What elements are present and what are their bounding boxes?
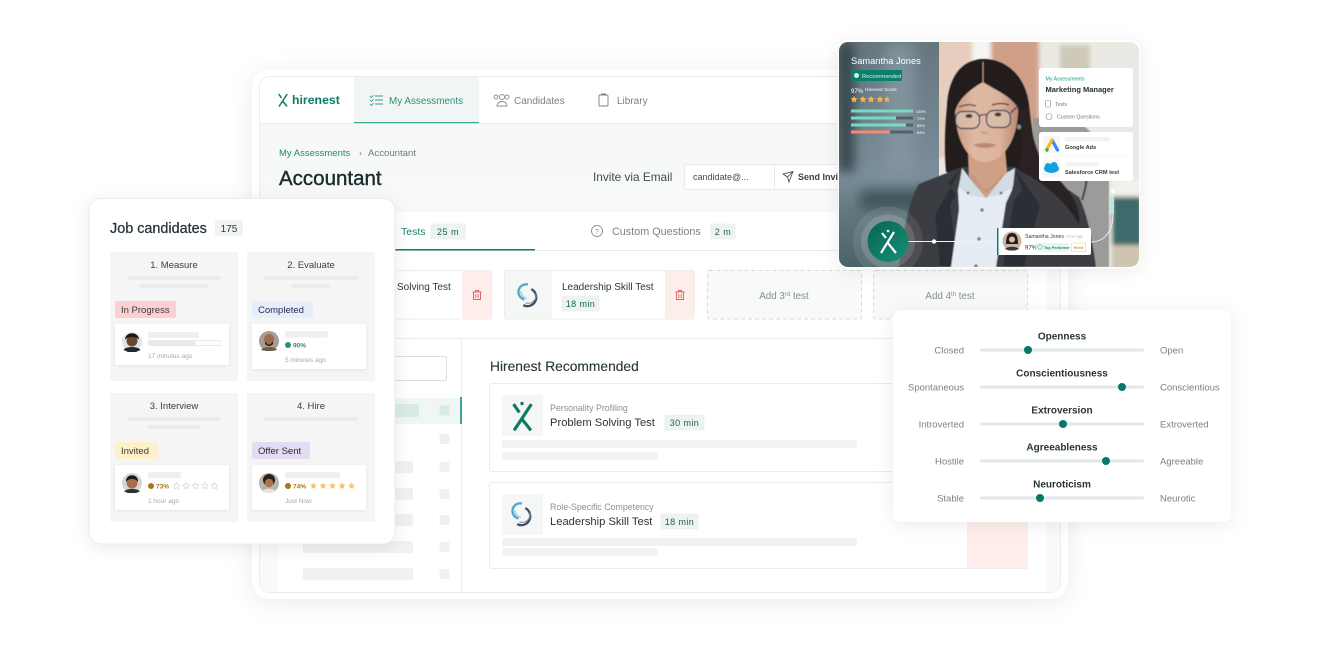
column: 1. Measure: 1. Measure (150, 260, 198, 271)
tab: Custom Questions: 2 m (715, 227, 731, 237)
count badge: 175 (221, 224, 238, 235)
candidate name and score overlay: Hirenest Score (865, 87, 897, 93)
tab: Tests (401, 224, 465, 239)
card: Marketing Manager: My Assessments (1046, 76, 1085, 82)
candidate card: 5 minutes ago (285, 357, 326, 364)
section tabs (395, 212, 1060, 251)
card: candidate summary: 1 hour ago (1065, 234, 1083, 238)
trait: Openness: Open (1160, 346, 1183, 356)
photo of candidate (838, 38, 1145, 273)
add 4th test slot (874, 270, 1028, 319)
candidate card: Just Now (285, 498, 312, 505)
invite via email: Invite via Email (593, 170, 672, 184)
glasses (956, 106, 1018, 128)
panel: main application window (252, 69, 1068, 599)
recommended card: Leadership Skill Test: Leadership Skill Test (550, 516, 653, 528)
badge: Recommended: Recommended (862, 74, 901, 80)
trait: Extroversion: Introverted (919, 420, 964, 430)
invite via email (593, 164, 850, 190)
content background (395, 251, 1047, 592)
add 4th test slot: test (956, 291, 975, 302)
score bars: 64% (917, 131, 925, 135)
shirt (951, 170, 1014, 267)
trait: Agreeableness (935, 442, 1203, 468)
tab: Tests: Tests (401, 226, 426, 238)
logo: hirenest: hirenest (292, 93, 340, 107)
test slot 1: Solving Test (397, 282, 451, 293)
trait: Neuroticism: Stable (937, 494, 964, 504)
add 4th test slot: Add 4 (925, 291, 951, 302)
candidate card: 73% (156, 484, 169, 490)
portrait (899, 59, 1109, 268)
trait: Extroversion: Extroversion (1031, 406, 1093, 416)
card: candidate summary: Top Performer (1044, 246, 1070, 250)
recommended card: Leadership Skill Test: Role-Specific Competency (550, 502, 654, 512)
column: 3. Interview: 3. Interview (150, 401, 198, 412)
candidate name and score overlay: 97% (851, 89, 864, 95)
back hair (945, 59, 1040, 175)
column: 1. Measure (110, 252, 238, 381)
navigation bar (260, 77, 1060, 124)
panel: personality profile (893, 310, 1231, 522)
score bars (851, 110, 926, 135)
trait: Neuroticism: Neurotic (1160, 494, 1196, 504)
trait: Openness (934, 332, 1183, 356)
test slot 2: Leadership Skill Test: Leadership Skill Test (562, 282, 654, 293)
nav item: Library (599, 94, 648, 107)
count badge (215, 220, 243, 236)
neck (968, 150, 1007, 198)
column: 4. Hire (247, 393, 375, 522)
candidate card: 1 hour ago (148, 498, 179, 505)
candidate name and score overlay: Samantha Jones (851, 56, 921, 66)
add 3rd test slot (708, 270, 862, 319)
recommended card: Leadership Skill Test: 18 min (665, 517, 694, 527)
recommended card: Problem Solving Test (490, 384, 1028, 472)
test slot 1 (395, 270, 492, 319)
face (955, 78, 1018, 162)
nav item: Candidates: Candidates (514, 96, 565, 107)
candidate card (252, 324, 366, 369)
status: In Progress: In Progress (121, 305, 170, 316)
card: candidate summary: Samantha Jones (1025, 234, 1064, 240)
page header background (260, 124, 1060, 212)
recommended card: Problem Solving Test: 30 min (670, 418, 699, 428)
trait: Conscientiousness (908, 368, 1220, 394)
eyebrows (959, 104, 1009, 107)
connector line (1091, 191, 1113, 242)
card: test integrations: Google Ads (1065, 145, 1096, 151)
test slot 2: Leadership Skill Test: 18 min (566, 299, 595, 309)
heading: Hirenest Recommended: Hirenest Recommended (490, 359, 639, 374)
score bars: 72% (917, 117, 925, 121)
trait: Openness: Closed (934, 346, 964, 356)
breadcrumb: My Assessments (279, 148, 351, 159)
column: 2. Evaluate: 2. Evaluate (287, 260, 335, 271)
trait: Neuroticism: Neuroticism (1033, 480, 1091, 490)
star rating (851, 96, 890, 102)
tab: Tests: 25 m (437, 227, 459, 237)
hair strand over jacket (1018, 108, 1079, 224)
trait: Conscientiousness: Spontaneous (908, 382, 964, 394)
active tab: My Assessments: My Assessments (389, 96, 463, 107)
buttons (980, 208, 984, 212)
trait: Conscientiousness: Conscientious (1160, 382, 1220, 394)
invite via email: candidate@... (693, 172, 749, 182)
column: 2. Evaluate (247, 252, 375, 381)
add 4th test slot: th (951, 292, 956, 298)
trait: Extroversion (919, 406, 1209, 430)
recommended card: Problem Solving Test: Personality Profiling (550, 403, 628, 413)
front hair (954, 58, 1019, 112)
column: 4. Hire: 4. Hire (297, 401, 325, 412)
tab: Custom Questions: ? (595, 229, 599, 236)
score bars: 89% (917, 124, 925, 128)
panel: Job candidates (89, 198, 395, 544)
card: candidate summary: Hired (1074, 246, 1084, 250)
panel: candidate video photo (838, 38, 1145, 276)
trait: Agreeableness: Agreeableness (1026, 442, 1098, 454)
add 3rd test slot: rd (785, 292, 790, 298)
active tab: My Assessments (354, 77, 479, 123)
nav item: Candidates (494, 94, 565, 107)
logo badge with connector (853, 206, 981, 267)
status: Offer Sent: Offer Sent (258, 446, 301, 457)
tab: Custom Questions (592, 224, 735, 239)
breadcrumb: Accountant (368, 148, 416, 159)
candidate card: 74% (293, 484, 306, 490)
trait: Agreeableness: Hostile (935, 456, 964, 468)
candidate card: 17 minutes ago (148, 353, 193, 360)
icon: Salesforce (1043, 160, 1060, 177)
status: Completed: Completed (258, 305, 304, 316)
trait: Conscientiousness: Conscientiousness (1016, 368, 1108, 380)
heading: Accountant: Accountant (279, 167, 382, 190)
trait: Extroversion: Extroverted (1160, 420, 1209, 430)
candidate card (252, 465, 366, 510)
tab: Custom Questions: Custom Questions (612, 226, 701, 238)
trait: Agreeableness: Agreeable (1160, 456, 1203, 468)
add 3rd test slot: test (790, 291, 809, 302)
breadcrumb (279, 148, 416, 159)
status: Invited: Invited (121, 446, 149, 457)
sidebar test list (278, 339, 462, 592)
candidate card (115, 465, 229, 510)
invite via email: Send Invi (798, 172, 838, 182)
add 3rd test slot: Add 3 (759, 291, 785, 302)
chair (1033, 118, 1109, 267)
breadcrumb: › (359, 148, 362, 158)
candidate name and score overlay (851, 56, 926, 135)
card: candidate summary: 97% (1025, 246, 1038, 252)
card: candidate summary (997, 228, 1091, 255)
card: test integrations (1039, 132, 1133, 181)
column: 3. Interview (110, 393, 238, 522)
test slot 2: Leadership Skill Test (504, 270, 694, 319)
nose and lips (981, 131, 988, 133)
candidate card: 90% (293, 342, 306, 350)
heading: Job candidates: Job candidates (110, 221, 207, 237)
candidate avatar (1002, 232, 1022, 250)
card: Marketing Manager: Custom Questions (1057, 114, 1100, 120)
nav item: Library: Library (617, 96, 648, 107)
trait: Openness: Openness (1038, 332, 1087, 342)
card: test integrations: Salesforce CRM test (1065, 170, 1119, 176)
icon: Google Ads (1043, 136, 1060, 153)
recommended card: Problem Solving Test: Problem Solving Test (550, 417, 656, 429)
card: Marketing Manager: Tests (1055, 102, 1068, 108)
trait: Neuroticism (937, 480, 1196, 504)
icon: hirenest figure (514, 402, 531, 430)
card: Marketing Manager (1039, 68, 1133, 127)
score bars: 100% (916, 110, 926, 114)
jacket (899, 167, 1096, 267)
recommended card: Leadership Skill Test (490, 482, 1028, 568)
icon: leadership ring (512, 503, 530, 525)
card: Marketing Manager: Marketing Manager (1046, 85, 1114, 94)
